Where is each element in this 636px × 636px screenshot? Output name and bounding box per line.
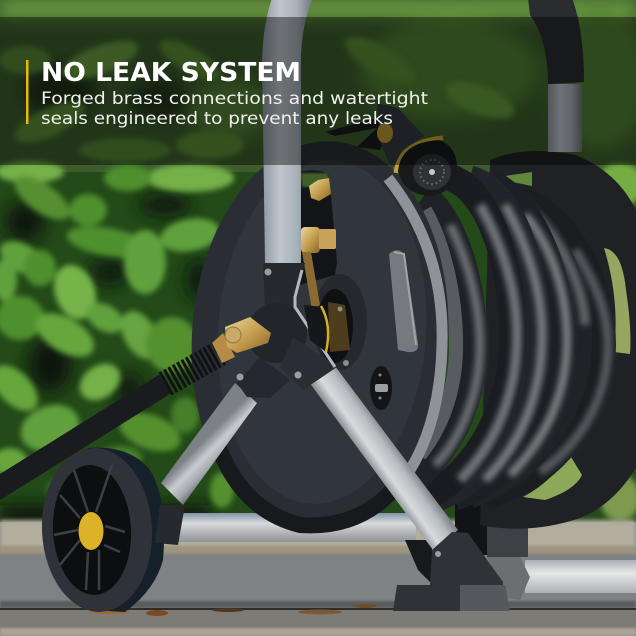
small brass fitting — [309, 178, 331, 201]
hose coils on the reel — [415, 176, 608, 500]
reel hub — [313, 274, 367, 370]
front leg tube — [306, 366, 458, 550]
drain vent — [370, 366, 392, 410]
rear reel disc — [480, 151, 636, 529]
wheel — [38, 445, 185, 615]
wheel spokes — [54, 465, 125, 590]
brass hose coupling — [212, 317, 271, 363]
subtitle: Forged brass connections and watertight — [41, 88, 428, 108]
rear disc window: top — [505, 172, 532, 186]
subtitle: seals engineered to prevent any leaks — [41, 108, 393, 128]
dark translucent headline band — [0, 17, 636, 165]
rear disc window: bottom — [523, 452, 582, 500]
dark seal collar — [304, 305, 329, 352]
title: NO LEAK SYSTEM — [41, 58, 301, 88]
silver wedge — [295, 270, 335, 367]
foot wedge — [430, 532, 503, 586]
wheel yellow cap — [78, 512, 104, 550]
garden hose and strain relief — [0, 352, 222, 492]
front leg foot — [393, 532, 530, 611]
large brass fitting — [301, 227, 336, 253]
right handle pole — [528, 0, 584, 152]
upright frame pole (left) — [262, 0, 313, 264]
brass connectors — [301, 178, 336, 310]
coil 5 — [455, 182, 567, 498]
wheel axle bracket — [155, 505, 185, 545]
yellow seal ring — [321, 306, 328, 352]
spray nozzle — [325, 103, 457, 196]
coil 4 — [435, 178, 542, 500]
coil 3 — [425, 176, 517, 498]
coil 1 — [420, 210, 456, 455]
wheel tread — [88, 448, 164, 612]
rear leg tube — [161, 383, 257, 505]
foot collar — [487, 557, 530, 600]
disc face — [206, 153, 438, 511]
disc lower ring — [216, 440, 408, 525]
accent bar — [26, 60, 28, 124]
front-right horizontal frame bar — [525, 560, 636, 593]
coil 6 — [470, 195, 585, 497]
front reel disc — [179, 133, 461, 541]
wheel face — [38, 445, 156, 615]
coil 2 — [415, 195, 480, 480]
grey rim highlight — [388, 178, 442, 482]
ground: pavement — [0, 520, 636, 636]
rear disc window: side — [604, 248, 630, 354]
rear horizontal frame bar — [178, 513, 416, 542]
foot base — [393, 585, 510, 611]
frame hub bracket — [236, 263, 337, 398]
grip handle inset — [389, 250, 418, 352]
under-reel bracket — [405, 503, 528, 584]
coil 7 — [485, 198, 608, 497]
central opening — [298, 170, 337, 285]
